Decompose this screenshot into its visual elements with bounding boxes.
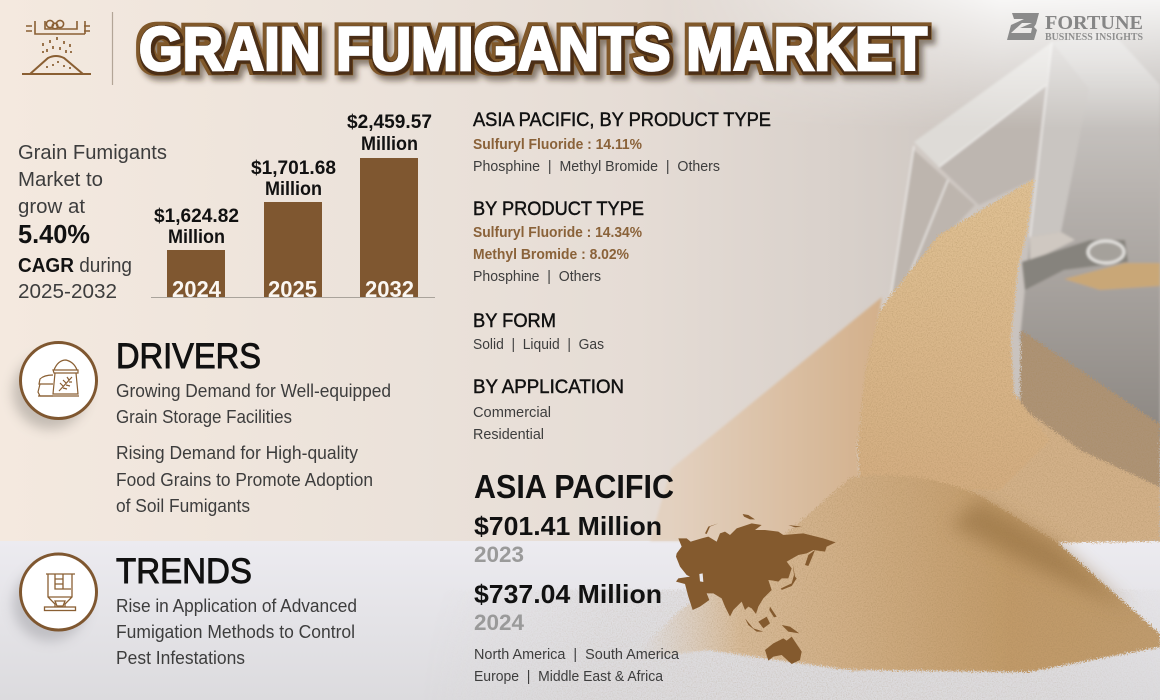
drivers text: Growing Demand for Well-equipped <box>116 381 391 401</box>
segment: by product type: Sulfuryl Fluoride : 14.34% <box>473 225 642 241</box>
regional values: Europe | Middle East & Africa <box>474 668 664 685</box>
segment: by form <box>473 311 604 353</box>
regional values: $701.41 Million <box>474 511 662 541</box>
regional values <box>474 468 680 685</box>
drivers heading: DRIVERS <box>116 337 261 376</box>
regional values: $737.04 Million <box>474 579 662 609</box>
regional values: ASIA PACIFIC <box>474 468 674 505</box>
segment: by form: BY FORM <box>473 311 556 332</box>
bar chart: market size: 2025 <box>268 276 317 302</box>
regional values: North America | South America <box>474 646 680 663</box>
regional values: 2023 <box>474 542 524 567</box>
CAGR text block: Market to <box>18 169 103 191</box>
bar chart: market size: $1,624.82 <box>154 206 239 227</box>
segment: by product type: Methyl Bromide : 8.02% <box>473 247 629 263</box>
title: GRAIN FUMIGANTS MARKET <box>139 15 927 83</box>
bar chart: market size: Million <box>361 134 418 155</box>
bar chart: market size: Million <box>168 227 225 248</box>
segment: by application <box>473 377 624 443</box>
segment: Asia Pacific by product type: ASIA PACIFIC, BY PRODUCT TYPE <box>473 110 771 131</box>
trends text: Pest Infestations <box>116 648 245 668</box>
bar chart: market size: $1,701.68 <box>251 158 336 179</box>
segment: Asia Pacific by product type: Sulfuryl Fluoride : 14.11% <box>473 137 642 153</box>
CAGR text block: 5.40% <box>18 219 90 249</box>
drivers text: of Soil Fumigants <box>116 496 250 516</box>
segment: by application: Commercial <box>473 405 551 421</box>
segment: by product type: BY PRODUCT TYPE <box>473 199 644 220</box>
bar chart: market size: 2024 <box>172 276 221 302</box>
CAGR text block: grow at <box>18 196 85 218</box>
trends text: Rise in Application of Advanced <box>116 596 357 616</box>
icon: fumigation machine in circle <box>13 554 96 641</box>
CAGR text block: Grain Fumigants <box>18 142 167 164</box>
segment: by product type: Phosphine | Others <box>473 269 601 285</box>
segment: Asia Pacific by product type: Phosphine | Methyl Bromide | Others <box>473 159 720 175</box>
trends heading: TRENDS <box>116 552 252 591</box>
drivers text <box>116 381 391 516</box>
CAGR text block <box>18 142 167 303</box>
drivers text: Grain Storage Facilities <box>116 407 292 427</box>
segment: Asia Pacific by product type <box>473 110 771 175</box>
trends text <box>116 596 357 668</box>
logo: Fortune Business Insights: BUSINESS INSIGHTS <box>1045 32 1143 43</box>
bar chart: market size: $2,459.57 <box>347 112 432 133</box>
map: Asia Pacific <box>676 514 836 664</box>
bar chart: market size: 2032 <box>365 276 414 302</box>
segment: by product type <box>473 199 644 285</box>
bar chart: market size <box>151 112 435 302</box>
drivers text: Food Grains to Promote Adoption <box>116 470 373 490</box>
segment: by form: Solid | Liquid | Gas <box>473 337 604 353</box>
logo: Fortune Business Insights <box>1007 12 1143 43</box>
CAGR text block: CAGR during <box>18 255 132 277</box>
header icon: grain hopper and pile <box>22 20 91 74</box>
segment: by application: BY APPLICATION <box>473 377 624 398</box>
bar chart: market size: Million <box>265 179 322 200</box>
drivers text: Rising Demand for High-quality <box>116 443 358 463</box>
CAGR text block: 2025-2032 <box>18 281 117 303</box>
logo: Fortune Business Insights: FORTUNE <box>1045 12 1143 34</box>
segment: by application: Residential <box>473 427 544 443</box>
trends text: Fumigation Methods to Control <box>116 622 355 642</box>
regional values: 2024 <box>474 610 525 635</box>
icon: grain sacks in circle <box>13 342 96 429</box>
header divider <box>112 12 114 85</box>
